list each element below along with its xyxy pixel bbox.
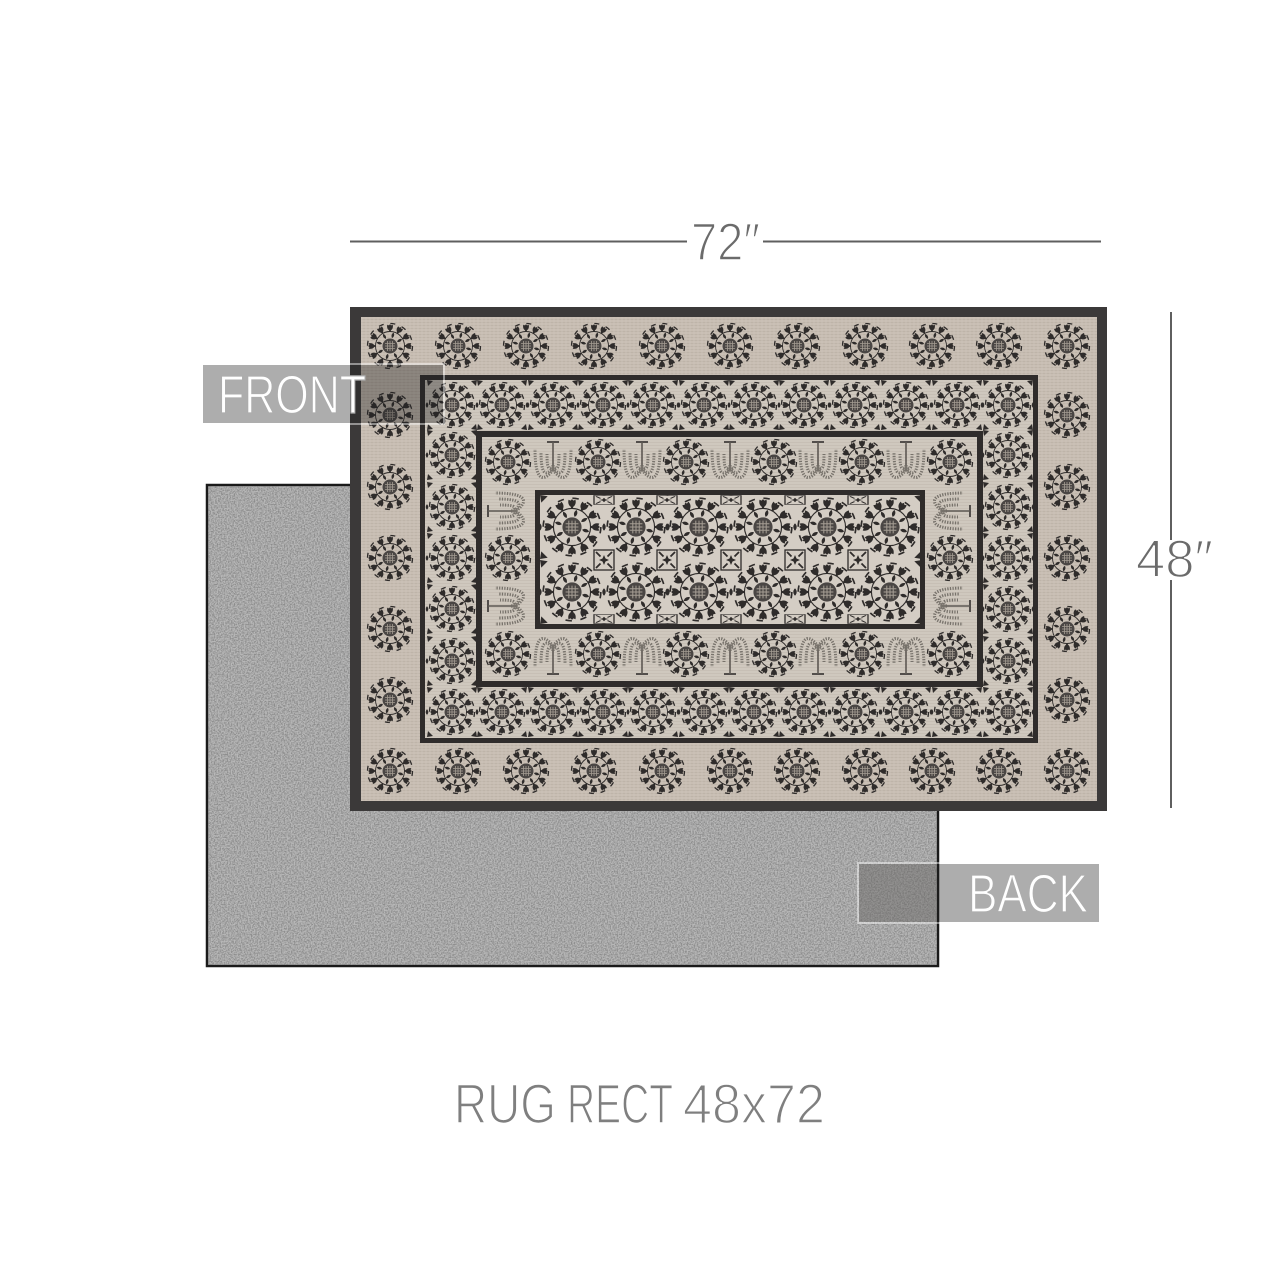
panel: back of rug bbox=[207, 485, 938, 966]
caption: RECT bbox=[567, 1072, 673, 1135]
back label: BACK bbox=[968, 864, 1088, 924]
caption: RUG bbox=[454, 1072, 556, 1135]
front label: FRONT bbox=[218, 365, 366, 425]
lattice border band bbox=[420, 375, 1038, 743]
caption bbox=[454, 1072, 825, 1135]
panel: front of rug bbox=[350, 307, 1107, 811]
back label bbox=[858, 863, 1100, 924]
medallion and willow band bbox=[476, 431, 983, 687]
width dimension line: 72″ bbox=[691, 213, 760, 272]
height dimension line: 48″ bbox=[1136, 530, 1213, 589]
outer medallion border bbox=[368, 324, 1090, 794]
center lattice field bbox=[535, 490, 925, 629]
caption: 48x72 bbox=[683, 1072, 825, 1135]
